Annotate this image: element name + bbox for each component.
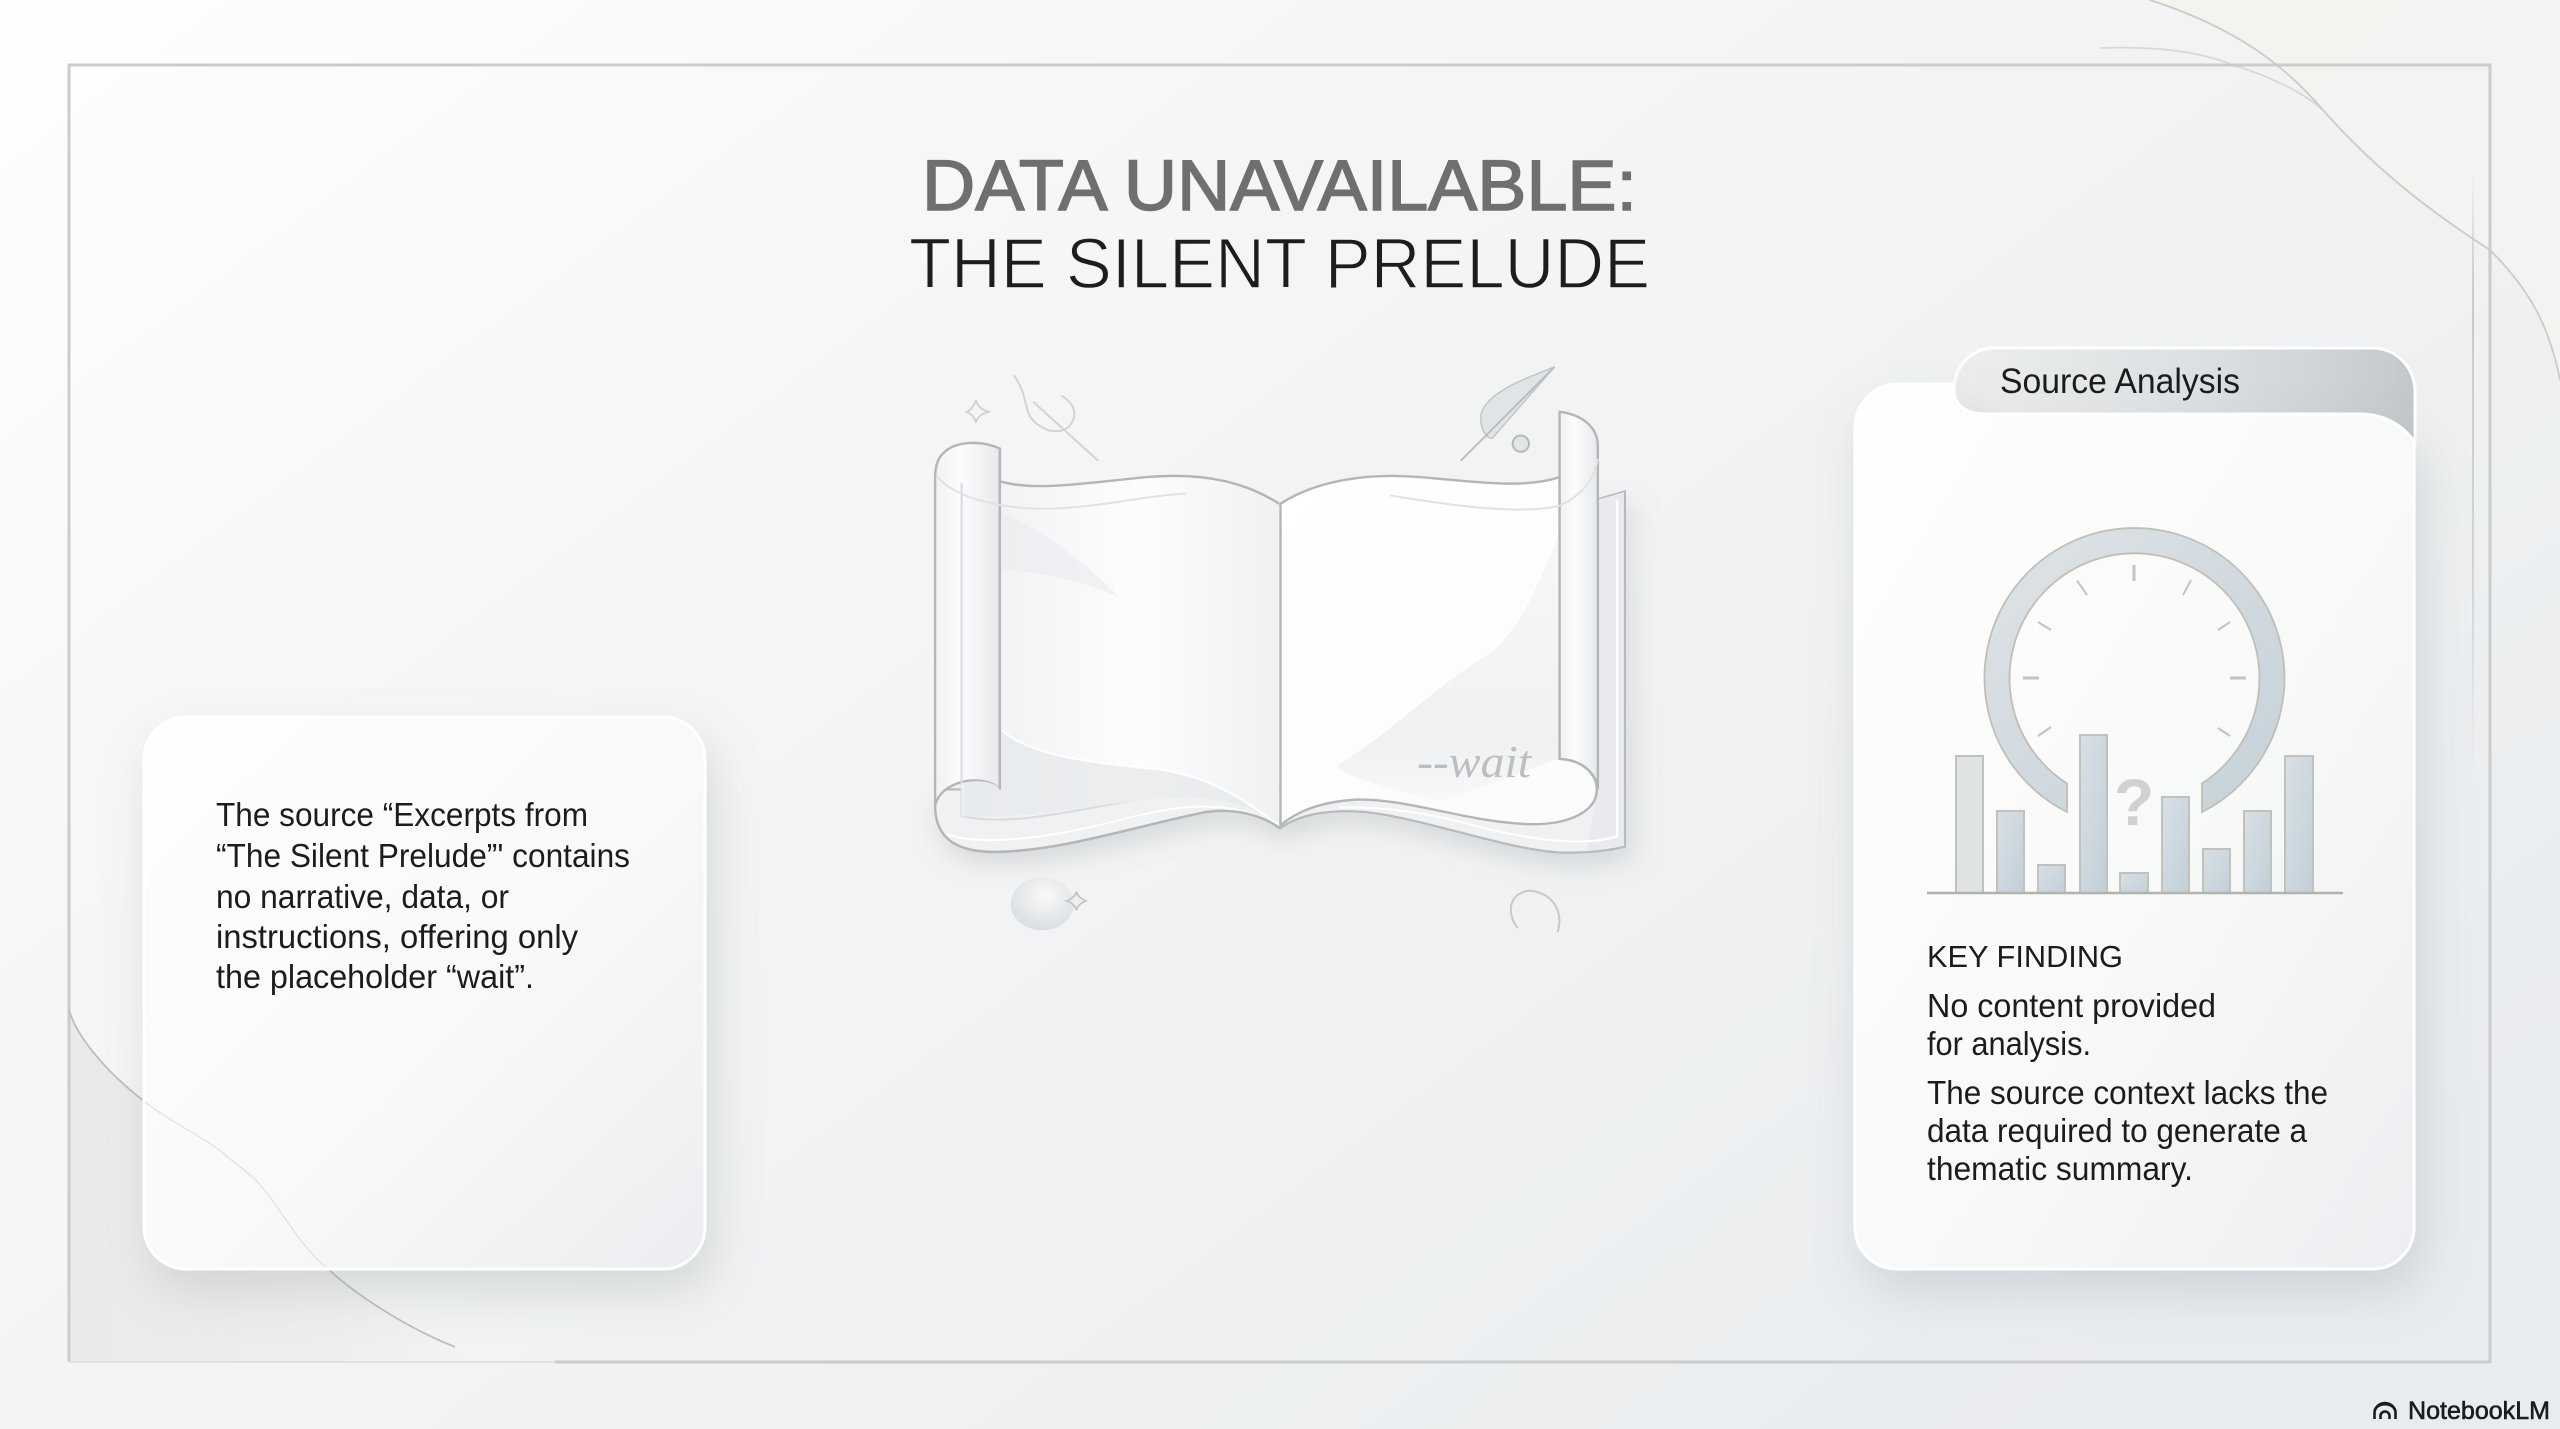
panel: source note [144, 717, 705, 1269]
right page shaded corner [1338, 532, 1559, 802]
key finding text [1927, 939, 2328, 1187]
gauge ticks [2023, 565, 2246, 736]
book body [935, 367, 1625, 932]
right page [1281, 476, 1597, 825]
NotebookLM logo [2374, 1397, 2550, 1425]
leaf top left [1014, 375, 1098, 461]
key finding text: thematic summary. [1927, 1150, 2193, 1187]
wait caption: --wait [1417, 736, 1532, 787]
orb [1011, 877, 1074, 930]
logo text: NotebookLM [2408, 1397, 2550, 1425]
left page [962, 476, 1279, 825]
illustration: open book [935, 367, 1625, 932]
source note text: no narrative, data, or [216, 878, 509, 915]
key finding text: KEY FINDING [1927, 939, 2123, 974]
translucent band [936, 459, 1598, 510]
bar chart [1927, 735, 2343, 893]
back sheet [935, 491, 1625, 853]
card background [144, 717, 705, 1269]
back sheet shading [1587, 492, 1624, 850]
tab label: Source Analysis [2000, 362, 2240, 401]
sparkle top left [967, 400, 990, 423]
logo icon [2374, 1403, 2396, 1419]
key finding text: for analysis. [1927, 1025, 2091, 1062]
card tab [1954, 348, 2415, 445]
gauge ring [1984, 528, 2284, 812]
key finding text: No content provided [1927, 987, 2216, 1024]
title line 2: THE SILENT PRELUDE [909, 225, 1650, 304]
source note text: instructions, offering only [216, 918, 578, 955]
title line 1: DATA UNAVAILABLE: [922, 147, 1637, 226]
title [909, 147, 1650, 304]
right scroll curl [1560, 412, 1598, 789]
sparkle bottom [1067, 891, 1087, 910]
source note text [216, 796, 630, 995]
key finding text: The source context lacks the [1927, 1074, 2328, 1111]
source note text: the placeholder “wait”. [216, 958, 534, 995]
question mark: ? [2114, 765, 2154, 839]
leaf top right [1481, 367, 1554, 438]
left scroll curl [935, 443, 1000, 806]
key finding text: data required to generate a [1927, 1112, 2308, 1149]
small drop [1513, 436, 1529, 452]
source note text: “The Silent Prelude”' contains [216, 837, 630, 874]
left page folded corner [964, 730, 1279, 825]
panel: source analysis [1855, 348, 2415, 1269]
source note text: The source “Excerpts from [216, 796, 588, 833]
card body [1855, 384, 2414, 1269]
small arc [1511, 891, 1559, 932]
